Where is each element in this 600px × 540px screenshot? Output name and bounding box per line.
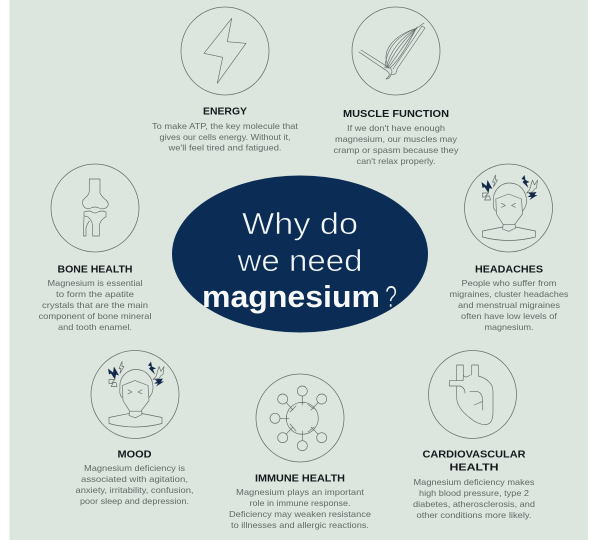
central title ellipse: Why do bbox=[242, 206, 358, 241]
text: headaches description: migraines, cluster headaches bbox=[450, 289, 568, 299]
text: bone health description: component of bone mineral bbox=[38, 311, 152, 321]
central title ellipse bbox=[172, 176, 428, 332]
icon: heart bbox=[428, 350, 516, 438]
text: muscle function description: can't relax properly. bbox=[356, 156, 436, 166]
panel: mood bbox=[76, 350, 194, 506]
text: muscle function description bbox=[334, 123, 459, 166]
text: muscle function description: cramp or spasm because they bbox=[334, 145, 459, 155]
text: mood description: anxiety, irritability, confusion, bbox=[76, 485, 194, 495]
text: headaches description: and menstrual migraines bbox=[458, 300, 560, 310]
text: immune health description: to illnesses and allergic reactions. bbox=[231, 520, 369, 530]
icon: head with lightning bolts bbox=[464, 164, 552, 252]
heading: headaches: HEADACHES bbox=[475, 264, 543, 276]
icon: immune cell bbox=[256, 374, 344, 462]
text: headaches description: magnesium. bbox=[484, 322, 534, 332]
text: energy description bbox=[152, 121, 299, 152]
text: headaches description bbox=[450, 278, 568, 332]
text: immune health description bbox=[229, 487, 371, 530]
icon: knee joint bbox=[51, 164, 139, 252]
panel: cardiovascular health bbox=[413, 350, 535, 520]
text: cardiovascular health description: Magnesium deficiency makes bbox=[414, 477, 534, 487]
text: bone health description: crystals that are the main bbox=[42, 300, 148, 310]
text: energy description: To make ATP, the key molecule that bbox=[152, 121, 299, 131]
heading: bone health: BONE HEALTH bbox=[58, 264, 132, 276]
heading: energy: ENERGY bbox=[203, 106, 247, 118]
panel: immune health bbox=[229, 374, 371, 530]
text: bone health description: Magnesium is essential bbox=[48, 278, 143, 288]
text: cardiovascular health description bbox=[413, 477, 535, 520]
panel: muscle function bbox=[334, 7, 459, 166]
text: mood description bbox=[76, 463, 194, 506]
text: bone health description bbox=[38, 278, 152, 332]
text: cardiovascular health description: other conditions more likely. bbox=[416, 510, 532, 520]
heading: mood: MOOD bbox=[118, 450, 152, 460]
text: mood description: poor sleep and depression. bbox=[80, 496, 189, 506]
text: mood description: Magnesium deficiency is bbox=[84, 463, 185, 473]
icon: head with lightning bolts bbox=[91, 350, 179, 438]
text: bone health description: and tooth enamel. bbox=[58, 322, 132, 332]
text: muscle function description: magnesium, our muscles may bbox=[335, 134, 458, 144]
heading: cardiovascular health: HEALTH bbox=[450, 462, 498, 474]
icon: muscle and arm bones bbox=[352, 7, 440, 95]
text: muscle function description: If we don't have enough bbox=[347, 123, 445, 133]
central title ellipse: we need bbox=[236, 243, 362, 278]
text: headaches description: often have low levels of bbox=[461, 311, 558, 321]
text: energy description: we'll feel tired and fatigued. bbox=[167, 142, 282, 152]
heading: immune health: IMMUNE HEALTH bbox=[255, 474, 345, 484]
panel: energy bbox=[152, 7, 299, 152]
text: headaches description: People who suffer from bbox=[462, 278, 556, 288]
panel: headaches bbox=[450, 164, 568, 332]
heading: cardiovascular health bbox=[422, 450, 526, 474]
text: immune health description: role in immune response. bbox=[250, 498, 350, 508]
text: cardiovascular health description: diabetes, atherosclerosis, and bbox=[413, 499, 535, 509]
central title ellipse: magnesium bbox=[202, 279, 380, 314]
panel: bone health bbox=[38, 164, 152, 332]
text: immune health description: Deficiency may weaken resistance bbox=[229, 509, 371, 519]
text: cardiovascular health description: high blood pressure, type 2 bbox=[419, 488, 529, 498]
text: bone health description: to form the apatite bbox=[56, 289, 134, 299]
central title ellipse: ? bbox=[385, 279, 397, 314]
text: mood description: associated with agitation, bbox=[81, 474, 188, 484]
heading: cardiovascular health: CARDIOVASCULAR bbox=[422, 450, 526, 460]
text: energy description: gives our cells energy. Without it, bbox=[160, 132, 290, 142]
icon: lightning bolt bbox=[181, 7, 269, 95]
text: immune health description: Magnesium plays an important bbox=[236, 487, 365, 497]
heading: muscle function: MUSCLE FUNCTION bbox=[343, 109, 449, 120]
